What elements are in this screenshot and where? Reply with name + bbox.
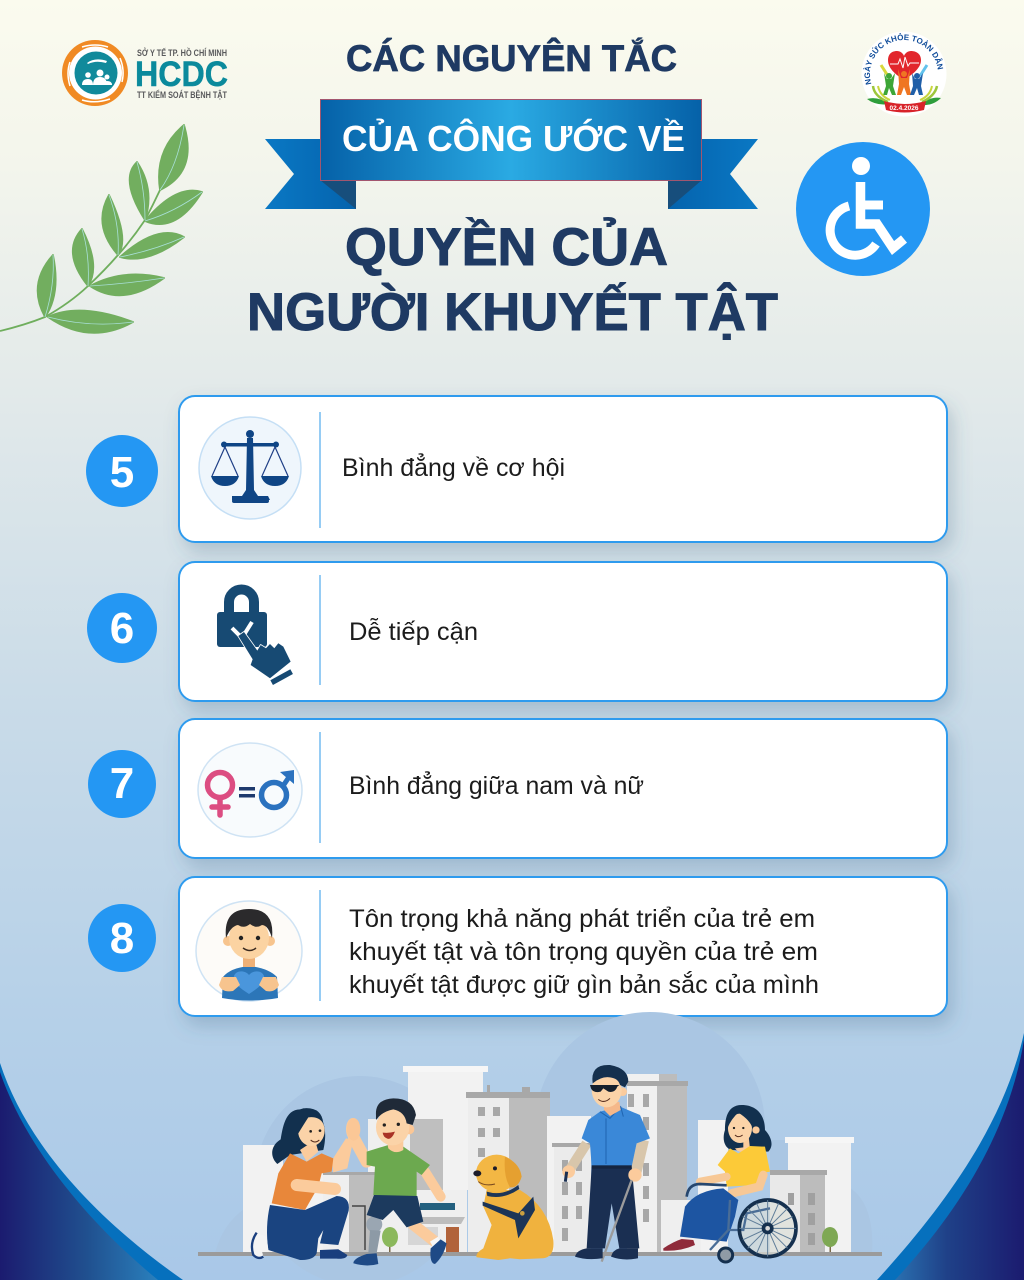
- guide dog: [473, 1155, 554, 1260]
- card 5: [179, 396, 947, 542]
- banner text: CỦA CÔNG ƯỚC VỀ: [342, 117, 685, 159]
- badge 8: [88, 904, 156, 972]
- logo: Ngày Sức khỏe Toàn dân: 02.4.2026: [890, 105, 919, 112]
- badge 5: 5: [110, 448, 134, 497]
- logo: Ngày Sức khỏe Toàn dân: [862, 32, 946, 116]
- woman in wheelchair: [663, 1105, 796, 1262]
- card 8 text: Tôn trọng khả năng phát triển của trẻ em: [349, 905, 815, 933]
- corner wave: bottom right: [877, 1033, 1024, 1280]
- illustration: city and people: [198, 1012, 882, 1280]
- badge 7: [88, 750, 156, 818]
- card 7: [179, 719, 947, 858]
- decorative branch: [0, 125, 202, 333]
- icon: wheelchair symbol: [796, 142, 930, 276]
- background blobs: [215, 1012, 872, 1280]
- corner wave: bottom left: [0, 1063, 183, 1280]
- man with white cane: [562, 1065, 650, 1262]
- icon: lock and hand: [217, 590, 292, 683]
- badge 8: 8: [110, 914, 134, 963]
- trees and lamp: [352, 1206, 838, 1253]
- ribbon banner: [265, 100, 758, 209]
- card 8 text: khuyết tật được giữ gìn bản sắc của mình: [349, 970, 819, 999]
- ground line: [198, 1252, 882, 1256]
- card 8 text: khuyết tật và tôn trọng quyền của trẻ em: [349, 938, 818, 966]
- card 8 text: [349, 905, 819, 999]
- woman kneeling: [252, 1108, 359, 1260]
- logo text: HCDC: HCDC: [135, 55, 228, 94]
- title line 1: CÁC NGUYÊN TẮC: [346, 37, 677, 79]
- logo text: department: SỞ Y TẾ TP. HỒ CHÍ MINH: [137, 47, 227, 58]
- card 5 text: Bình đẳng về cơ hội: [342, 452, 565, 482]
- badge 6: [87, 593, 157, 663]
- city buildings: [243, 1066, 854, 1253]
- logo arc text: NGÀY SỨC KHỎE TOÀN DÂN: [863, 33, 944, 85]
- badge 7: 7: [110, 759, 134, 808]
- card 6: [179, 562, 947, 701]
- logo leaves: [867, 86, 941, 105]
- icon: gender equality: [198, 743, 302, 837]
- logo people: [881, 65, 927, 95]
- card 8: [179, 877, 947, 1016]
- logo date ribbon: [884, 101, 926, 112]
- icon: scales of justice: [199, 417, 301, 519]
- boy with prosthetic leg: [347, 1098, 447, 1265]
- card 6 text: Dễ tiếp cận: [349, 617, 478, 646]
- title line 3: NGƯỜI KHUYẾT TẬT: [247, 281, 778, 342]
- badge 5: [86, 435, 158, 507]
- logo heart: [888, 51, 921, 80]
- logo: HCDC: [62, 40, 228, 106]
- badge 6: 6: [110, 604, 134, 653]
- title line 2: QUYỀN CỦA: [345, 217, 668, 277]
- logo text: center name: TT KIỂM SOÁT BỆNH TẬT: [137, 89, 227, 100]
- card 7 text: Bình đẳng giữa nam và nữ: [349, 770, 644, 800]
- icon: child holding heart: [196, 901, 302, 1001]
